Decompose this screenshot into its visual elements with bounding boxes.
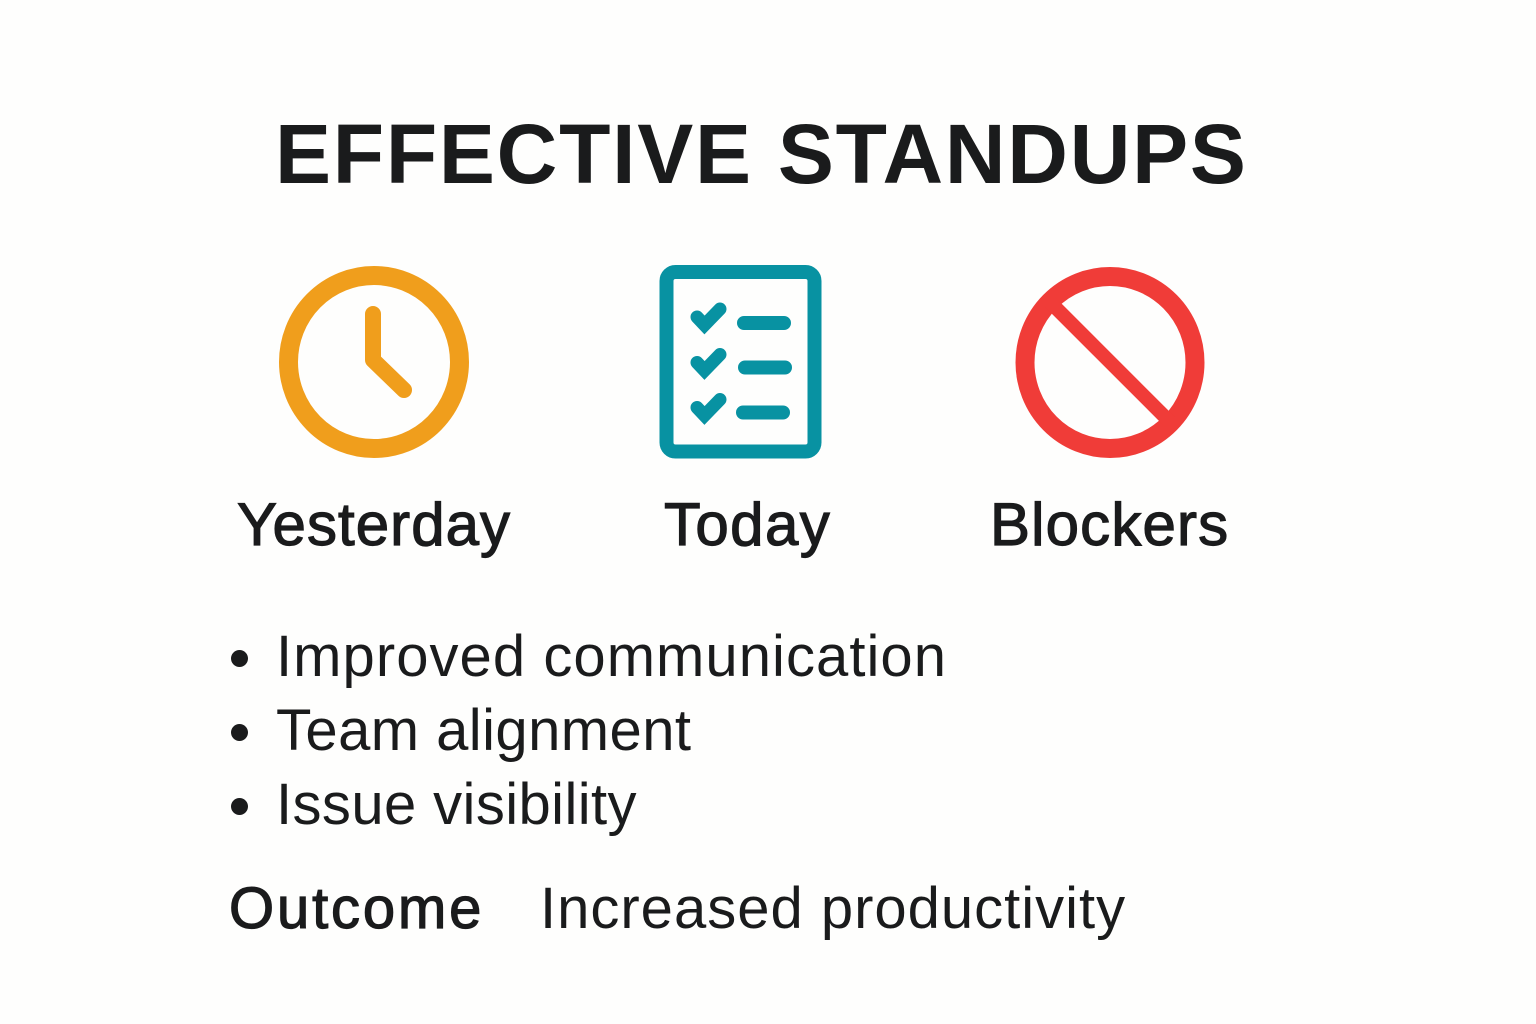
benefits list: [231, 624, 947, 837]
outcome text: Increased productivity: [540, 876, 1126, 941]
label: Yesterday: Yesterday: [237, 491, 511, 558]
benefit: Team alignment: Team alignment: [276, 698, 691, 763]
label: Blockers: Blockers: [990, 491, 1229, 558]
title: EFFECTIVE STANDUPS: [275, 107, 1248, 201]
label: Today: Today: [664, 491, 831, 558]
icon: clock: [288, 276, 460, 448]
icon: prohibited sign: [1025, 276, 1195, 448]
benefit: Improved communication: Improved communication: [276, 624, 947, 689]
icon: checklist: [666, 272, 814, 452]
benefit: Issue visibility: Issue visibility: [276, 772, 637, 837]
outcome heading: Outcome: [229, 876, 484, 941]
